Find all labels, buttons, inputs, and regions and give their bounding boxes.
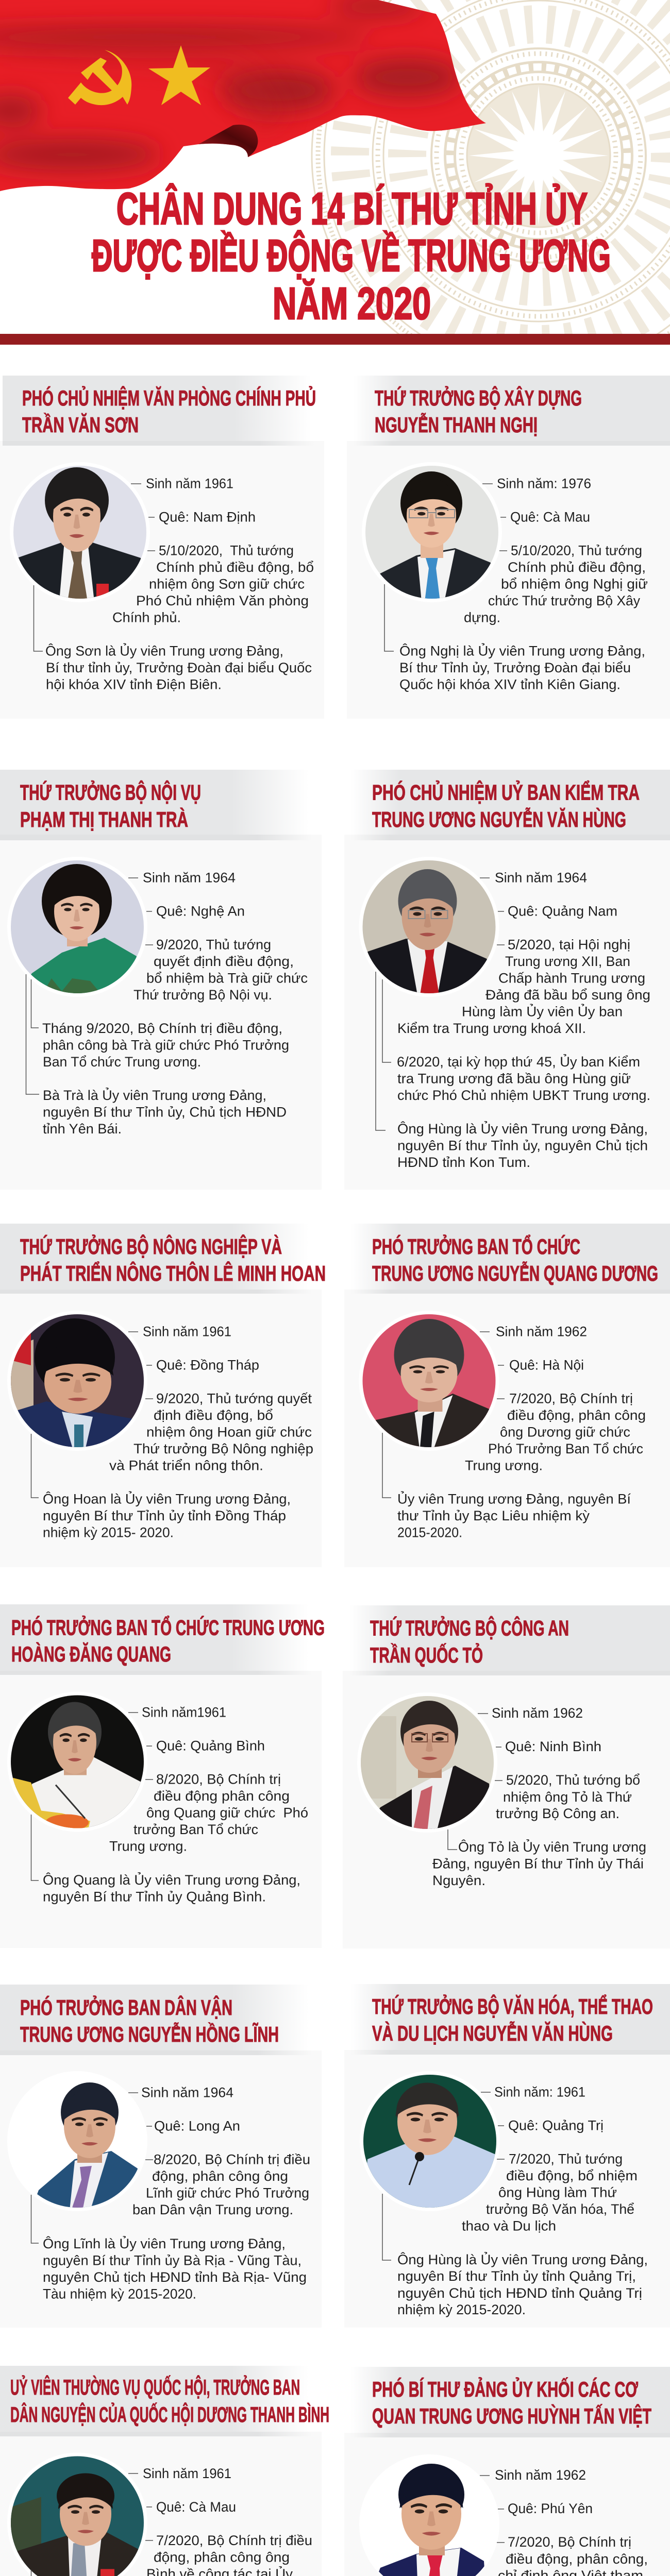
- heading: [10, 2375, 329, 2427]
- heading: [372, 2377, 651, 2428]
- panel: Nguyễn Văn Hùng (VHTTDL): [344, 1984, 670, 2328]
- text block: Tàu nhiệm kỳ 2015-2020.: [43, 2286, 196, 2302]
- text block: Ông Hùng là Ủy viên Trung ương Đảng,: [397, 1121, 648, 1137]
- heading: [11, 1615, 325, 1666]
- text block: [397, 1324, 646, 1540]
- heading: NGUYỄN THANH NGHỊ: [375, 412, 538, 437]
- text block: Ban Tổ chức Trung ương.: [43, 1054, 201, 1070]
- leader lines: [384, 484, 507, 651]
- text block: Ông Hoan là Ủy viên Trung ương Đảng,: [43, 1491, 291, 1506]
- portrait: [360, 2071, 500, 2211]
- title divider bar: [0, 334, 670, 345]
- text block: bổ nhiệm ông Nghị giữ: [501, 576, 648, 591]
- text block: nguyên Bí thư Tỉnh ủy Quảng Bình.: [43, 1889, 266, 1904]
- text block: Kiểm tra Trung ương khoá XII.: [397, 1021, 586, 1036]
- heading: [20, 780, 201, 832]
- heading: UỶ VIÊN THƯỜNG VỤ QUỐC HỘI, TRƯỞNG BAN: [10, 2375, 300, 2399]
- heading: TRẦN QUỐC TỎ: [370, 1642, 483, 1667]
- text block: điều động phân công: [154, 1788, 290, 1804]
- text block: Đảng đã bầu bổ sung ông: [485, 987, 650, 1003]
- heading: [370, 1616, 569, 1667]
- portrait: [7, 1692, 147, 1832]
- title: [92, 183, 611, 329]
- leader lines: [31, 1332, 153, 1498]
- panel: Trần Quốc Tỏ: [343, 1605, 670, 1948]
- heading: HOÀNG ĐĂNG QUANG: [11, 1642, 171, 1666]
- text block: định điều động, bổ: [154, 1408, 273, 1423]
- leader lines: [26, 2473, 153, 2576]
- text block: 2015-2020.: [397, 1525, 462, 1540]
- text block: ban Dân vận Trung ương.: [132, 2202, 293, 2217]
- text block: [397, 2467, 648, 2576]
- text block: Quê: Nam Định: [159, 509, 256, 524]
- text block: 8/2020, Bộ Chính trị điều: [154, 2151, 310, 2167]
- text block: Chính phủ.: [112, 610, 181, 625]
- text block: 6/2020, tại kỳ họp thứ 45, Ủy ban Kiểm: [397, 1054, 640, 1070]
- heading: TRUNG ƯƠNG NGUYỄN HỒNG LĨNH: [20, 2022, 279, 2046]
- text block: nguyên Bí thư Tỉnh ủy, nguyên Chủ tịch: [397, 1138, 648, 1153]
- text block: Chính phủ điều động,: [508, 560, 646, 575]
- leader lines: [376, 878, 505, 1130]
- heading: [375, 385, 582, 437]
- text block: [397, 870, 650, 1170]
- leader lines: [26, 878, 153, 1094]
- text block: điều động, bổ nhiệm: [506, 2168, 638, 2183]
- text block: nguyên Bí thư Tỉnh ủy, Chủ tịch HĐND: [43, 1105, 287, 1120]
- title: NĂM 2020: [273, 279, 431, 329]
- text block: động, phân công ông: [152, 2168, 288, 2184]
- text block: trưởng Bộ Văn hóa, Thể: [486, 2201, 634, 2217]
- text block: Ông Quang là Ủy viên Trung ương Đảng,: [43, 1872, 300, 1888]
- text block: ông Dương giữ chức: [500, 1424, 630, 1439]
- leader lines: [448, 1714, 502, 1850]
- text block: ông Hùng làm Thứ: [498, 2184, 617, 2200]
- heading: [20, 1995, 279, 2046]
- text block: chức Thứ trưởng Bộ Xây: [488, 593, 641, 608]
- panel: Phạm Thị Thanh Trà: [0, 770, 307, 1133]
- text block: nhiệm ông Tỏ là Thứ: [503, 1789, 632, 1805]
- text block: Quê: Quảng Trị: [508, 2117, 604, 2133]
- text block: phân công bà Trà giữ chức Phó Trưởng: [43, 1038, 289, 1053]
- text block: quyết định điều động,: [154, 954, 294, 969]
- portrait: [13, 466, 146, 599]
- text block: Quốc hội khóa XIV tỉnh Kiên Giang.: [399, 677, 621, 692]
- text block: dựng.: [464, 610, 500, 625]
- text block: nguyên Chủ tịch HĐND tỉnh Quảng Trị: [397, 2285, 642, 2301]
- text block: ông Quang giữ chức Phó: [146, 1805, 308, 1821]
- text block: hội khóa XIV tỉnh Điện Biên.: [46, 677, 222, 692]
- portrait: [11, 1314, 144, 1447]
- text block: Trung ương.: [465, 1458, 543, 1473]
- text block: bổ nhiệm bà Trà giữ chức: [146, 971, 308, 986]
- heading: PHÓ TRƯỞNG BAN DÂN VẬN: [20, 1995, 232, 2020]
- text block: [43, 2084, 310, 2302]
- text block: 5/10/2020, Thủ tướng: [511, 543, 642, 558]
- panel: Nguyễn Quang Dương: [354, 1224, 670, 1537]
- text block: Quê: Cà Mau: [156, 2499, 236, 2515]
- text block: Sinh năm 1962: [496, 1324, 587, 1340]
- text block: Sinh năm 1964: [143, 870, 236, 885]
- text block: Phó Trưởng Ban Tổ chức: [488, 1441, 643, 1456]
- text block: Phó Chủ nhiệm Văn phòng: [136, 593, 309, 608]
- heading: [20, 1234, 326, 1285]
- text block: Chấp hành Trung ương: [498, 971, 645, 986]
- heading: TRẦN VĂN SƠN: [22, 413, 139, 437]
- text block: Ông Nghị là Ủy viên Trung ương Đảng,: [399, 643, 645, 658]
- text block: tra Trung ương đã bầu ông Hùng giữ: [397, 1071, 631, 1086]
- text block: [43, 1704, 308, 1904]
- text block: nguyên Chủ tịch HĐND tỉnh Bà Rịa- Vũng: [43, 2269, 307, 2285]
- text block: Chính phủ điều động, bổ: [156, 560, 314, 575]
- leader lines: [31, 2093, 153, 2243]
- text block: 7/2020, Bộ Chính trị: [509, 1391, 633, 1406]
- text block: 9/2020, Thủ tướng quyết: [156, 1391, 312, 1406]
- text block: 5/10/2020, Thủ tướng: [159, 543, 294, 558]
- text block: 5/2020, Thủ tướng bổ: [506, 1772, 640, 1788]
- text block: 5/2020, tại Hội nghị: [508, 937, 630, 952]
- text block: Nguyên.: [432, 1873, 485, 1888]
- text block: [42, 870, 308, 1137]
- panel: Huỳnh Tấn Việt: [344, 2367, 670, 2576]
- text block: trưởng Ban Tổ chức: [133, 1822, 258, 1837]
- text block: Trung ương.: [109, 1838, 187, 1854]
- text block: Quê: Nghệ An: [156, 904, 245, 919]
- text block: Sinh năm 1962: [495, 2467, 586, 2483]
- flag fold shadow: [198, 125, 258, 157]
- text block: động, phân công ông: [154, 2549, 290, 2565]
- panel: Nguyễn Văn Hùng (UBKT): [344, 770, 670, 1190]
- leader lines: [31, 1713, 153, 1880]
- text block: Quê: Ninh Bình: [505, 1739, 601, 1754]
- text block: nguyên Bí thư Tỉnh ủy tỉnh Quảng Trị,: [397, 2268, 636, 2284]
- text block: nhiệm ông Hoan giữ chức: [146, 1424, 312, 1439]
- text block: chức Phó Chủ nhiệm UBKT Trung ương.: [397, 1088, 650, 1103]
- text block: Sinh năm 1961: [146, 476, 233, 492]
- text block: nguyên Bí thư Tỉnh ủy tỉnh Đồng Tháp: [43, 1508, 286, 1523]
- text block: Bí thư tỉnh ủy, Trưởng Đoàn đại biểu Quốc: [46, 660, 312, 675]
- heading: DÂN NGUYỆN CỦA QUỐC HỘI DƯƠNG THANH BÌNH: [10, 2402, 329, 2427]
- heading: PHẠM THỊ THANH TRÀ: [20, 807, 188, 832]
- portrait: [7, 2452, 147, 2576]
- leader lines: [34, 484, 155, 651]
- heading: THỨ TRƯỞNG BỘ CÔNG AN: [370, 1616, 569, 1640]
- icon: gold star: [148, 45, 210, 105]
- text block: Lĩnh giữ chức Phó Trưởng: [146, 2185, 309, 2201]
- text block: Ông Tỏ là Ủy viên Trung ương: [458, 1839, 646, 1855]
- bronze drum background motif: [311, 0, 670, 334]
- text block: Sinh năm: 1961: [494, 2084, 585, 2100]
- text block: Sinh năm 1962: [492, 1705, 583, 1721]
- text block: [45, 476, 314, 692]
- icon: hammer and sickle: [68, 50, 131, 105]
- text block: Hùng làm Ủy viên Ủy ban: [462, 1004, 623, 1019]
- heading: [372, 1233, 658, 1285]
- text block: [43, 2466, 315, 2576]
- heading: [372, 1994, 653, 2045]
- panel: Dương Thanh Bình: [0, 2366, 329, 2576]
- heading: [22, 385, 316, 437]
- heading: THỨ TRƯỞNG BỘ NÔNG NGHIỆP VÀ: [20, 1234, 282, 1259]
- heading: PHÓ TRƯỞNG BAN TỔ CHỨC TRUNG ƯƠNG: [11, 1615, 325, 1639]
- portrait: [357, 1692, 497, 1833]
- portrait: [359, 2454, 499, 2576]
- panel: Hoàng Đăng Quang: [0, 1604, 325, 1948]
- text block: thao và Du lịch: [462, 2218, 556, 2234]
- text block: Thứ trưởng Bộ Nông nghiệp: [133, 1441, 313, 1456]
- text block: Thứ trưởng Bộ Nội vụ.: [133, 987, 272, 1003]
- text block: Sinh năm 1964: [141, 2084, 233, 2100]
- text block: Quê: Hà Nội: [509, 1357, 584, 1372]
- text block: trưởng Bộ Công an.: [496, 1806, 619, 1821]
- heading: PHÁT TRIỂN NÔNG THÔN LÊ MINH HOAN: [20, 1261, 326, 1285]
- text block: Trung ương XII, Ban: [505, 954, 630, 969]
- text block: Ông Lĩnh là Ủy viên Trung ương Đảng,: [43, 2236, 286, 2251]
- text block: [399, 476, 648, 692]
- heading: [372, 780, 640, 832]
- portrait: [11, 860, 144, 993]
- text block: nhiệm kỳ 2015-2020.: [397, 2302, 526, 2317]
- portrait: [365, 466, 498, 599]
- leader lines: [382, 2092, 505, 2260]
- text block: và Phát triển nông thôn.: [109, 1458, 263, 1473]
- text block: Quê: Quảng Bình: [156, 1738, 265, 1754]
- text block: Sinh năm: 1976: [497, 476, 591, 492]
- portrait: [363, 1314, 496, 1447]
- portrait: [363, 860, 496, 993]
- panel: Lê Minh Hoan: [0, 1224, 326, 1567]
- text block: Bí thư Tỉnh ủy, Trưởng Đoàn đại biểu: [399, 660, 631, 675]
- text block: nguyên Bí thư Tỉnh ủy Bà Rịa - Vũng Tàu,: [43, 2252, 301, 2268]
- text block: điều động, phân công,: [506, 2551, 648, 2567]
- text block: Tháng 9/2020, Bộ Chính trị điều động,: [42, 1021, 282, 1036]
- text block: thư Tỉnh ủy Bạc Liêu nhiệm kỳ: [397, 1508, 590, 1523]
- text block: Sinh năm1961: [142, 1704, 226, 1720]
- text block: 7/2020, Bộ Chính trị: [508, 2534, 631, 2550]
- heading: PHÓ CHỦ NHIỆM VĂN PHÒNG CHÍNH PHỦ: [22, 385, 316, 410]
- text block: 8/2020, Bộ Chính trị: [156, 1771, 281, 1787]
- party flag: [0, 0, 495, 196]
- text block: nhiệm kỳ 2015- 2020.: [43, 1525, 174, 1540]
- heading: THỨ TRƯỞNG BỘ NỘI VỤ: [20, 780, 201, 805]
- text block: 7/2020, Bộ Chính trị điều: [156, 2533, 312, 2548]
- panel: Nguyễn Thanh Nghị: [357, 376, 670, 692]
- text block: [397, 2084, 648, 2317]
- text block: Quê: Đồng Tháp: [156, 1357, 259, 1372]
- text block: [43, 1324, 313, 1540]
- text block: Bà Trà là Ủy viên Trung ương Đảng,: [43, 1088, 266, 1103]
- text block: Sinh năm 1961: [143, 1324, 231, 1340]
- portrait: [7, 2071, 147, 2211]
- text block: tỉnh Yên Bái.: [43, 1121, 122, 1137]
- text block: Sinh năm 1961: [143, 2466, 231, 2481]
- text block: Quê: Long An: [154, 2119, 240, 2134]
- text block: HĐND tỉnh Kon Tum.: [397, 1155, 530, 1170]
- text block: Sinh năm 1964: [495, 870, 587, 885]
- leader lines: [382, 2476, 505, 2576]
- text block: Ủy viên Trung ương Đảng, nguyên Bí: [397, 1491, 631, 1506]
- text block: Đảng, nguyên Bí thư Tỉnh ủy Thái: [432, 1856, 644, 1871]
- text block: Ông Hùng là Ủy viên Trung ương Đảng,: [397, 2252, 648, 2267]
- text block: 9/2020, Thủ tướng: [156, 937, 271, 952]
- text block: [432, 1705, 646, 1888]
- text block: nhiệm ông Sơn giữ chức: [149, 576, 305, 591]
- leader lines: [382, 1332, 505, 1498]
- text block: Ông Sơn là Ủy viên Trung ương Đảng,: [45, 643, 283, 658]
- panel: Nguyễn Hồng Lĩnh: [0, 1985, 322, 2328]
- text block: Quê: Phú Yên: [508, 2501, 593, 2516]
- text block: Quê: Quảng Nam: [508, 904, 617, 919]
- panel: Trần Văn Sơn: [3, 376, 315, 691]
- text block: 7/2020, Thủ tướng: [509, 2151, 623, 2167]
- text block: Quê: Cà Mau: [510, 509, 590, 524]
- text block: điều động, phân công: [507, 1408, 646, 1423]
